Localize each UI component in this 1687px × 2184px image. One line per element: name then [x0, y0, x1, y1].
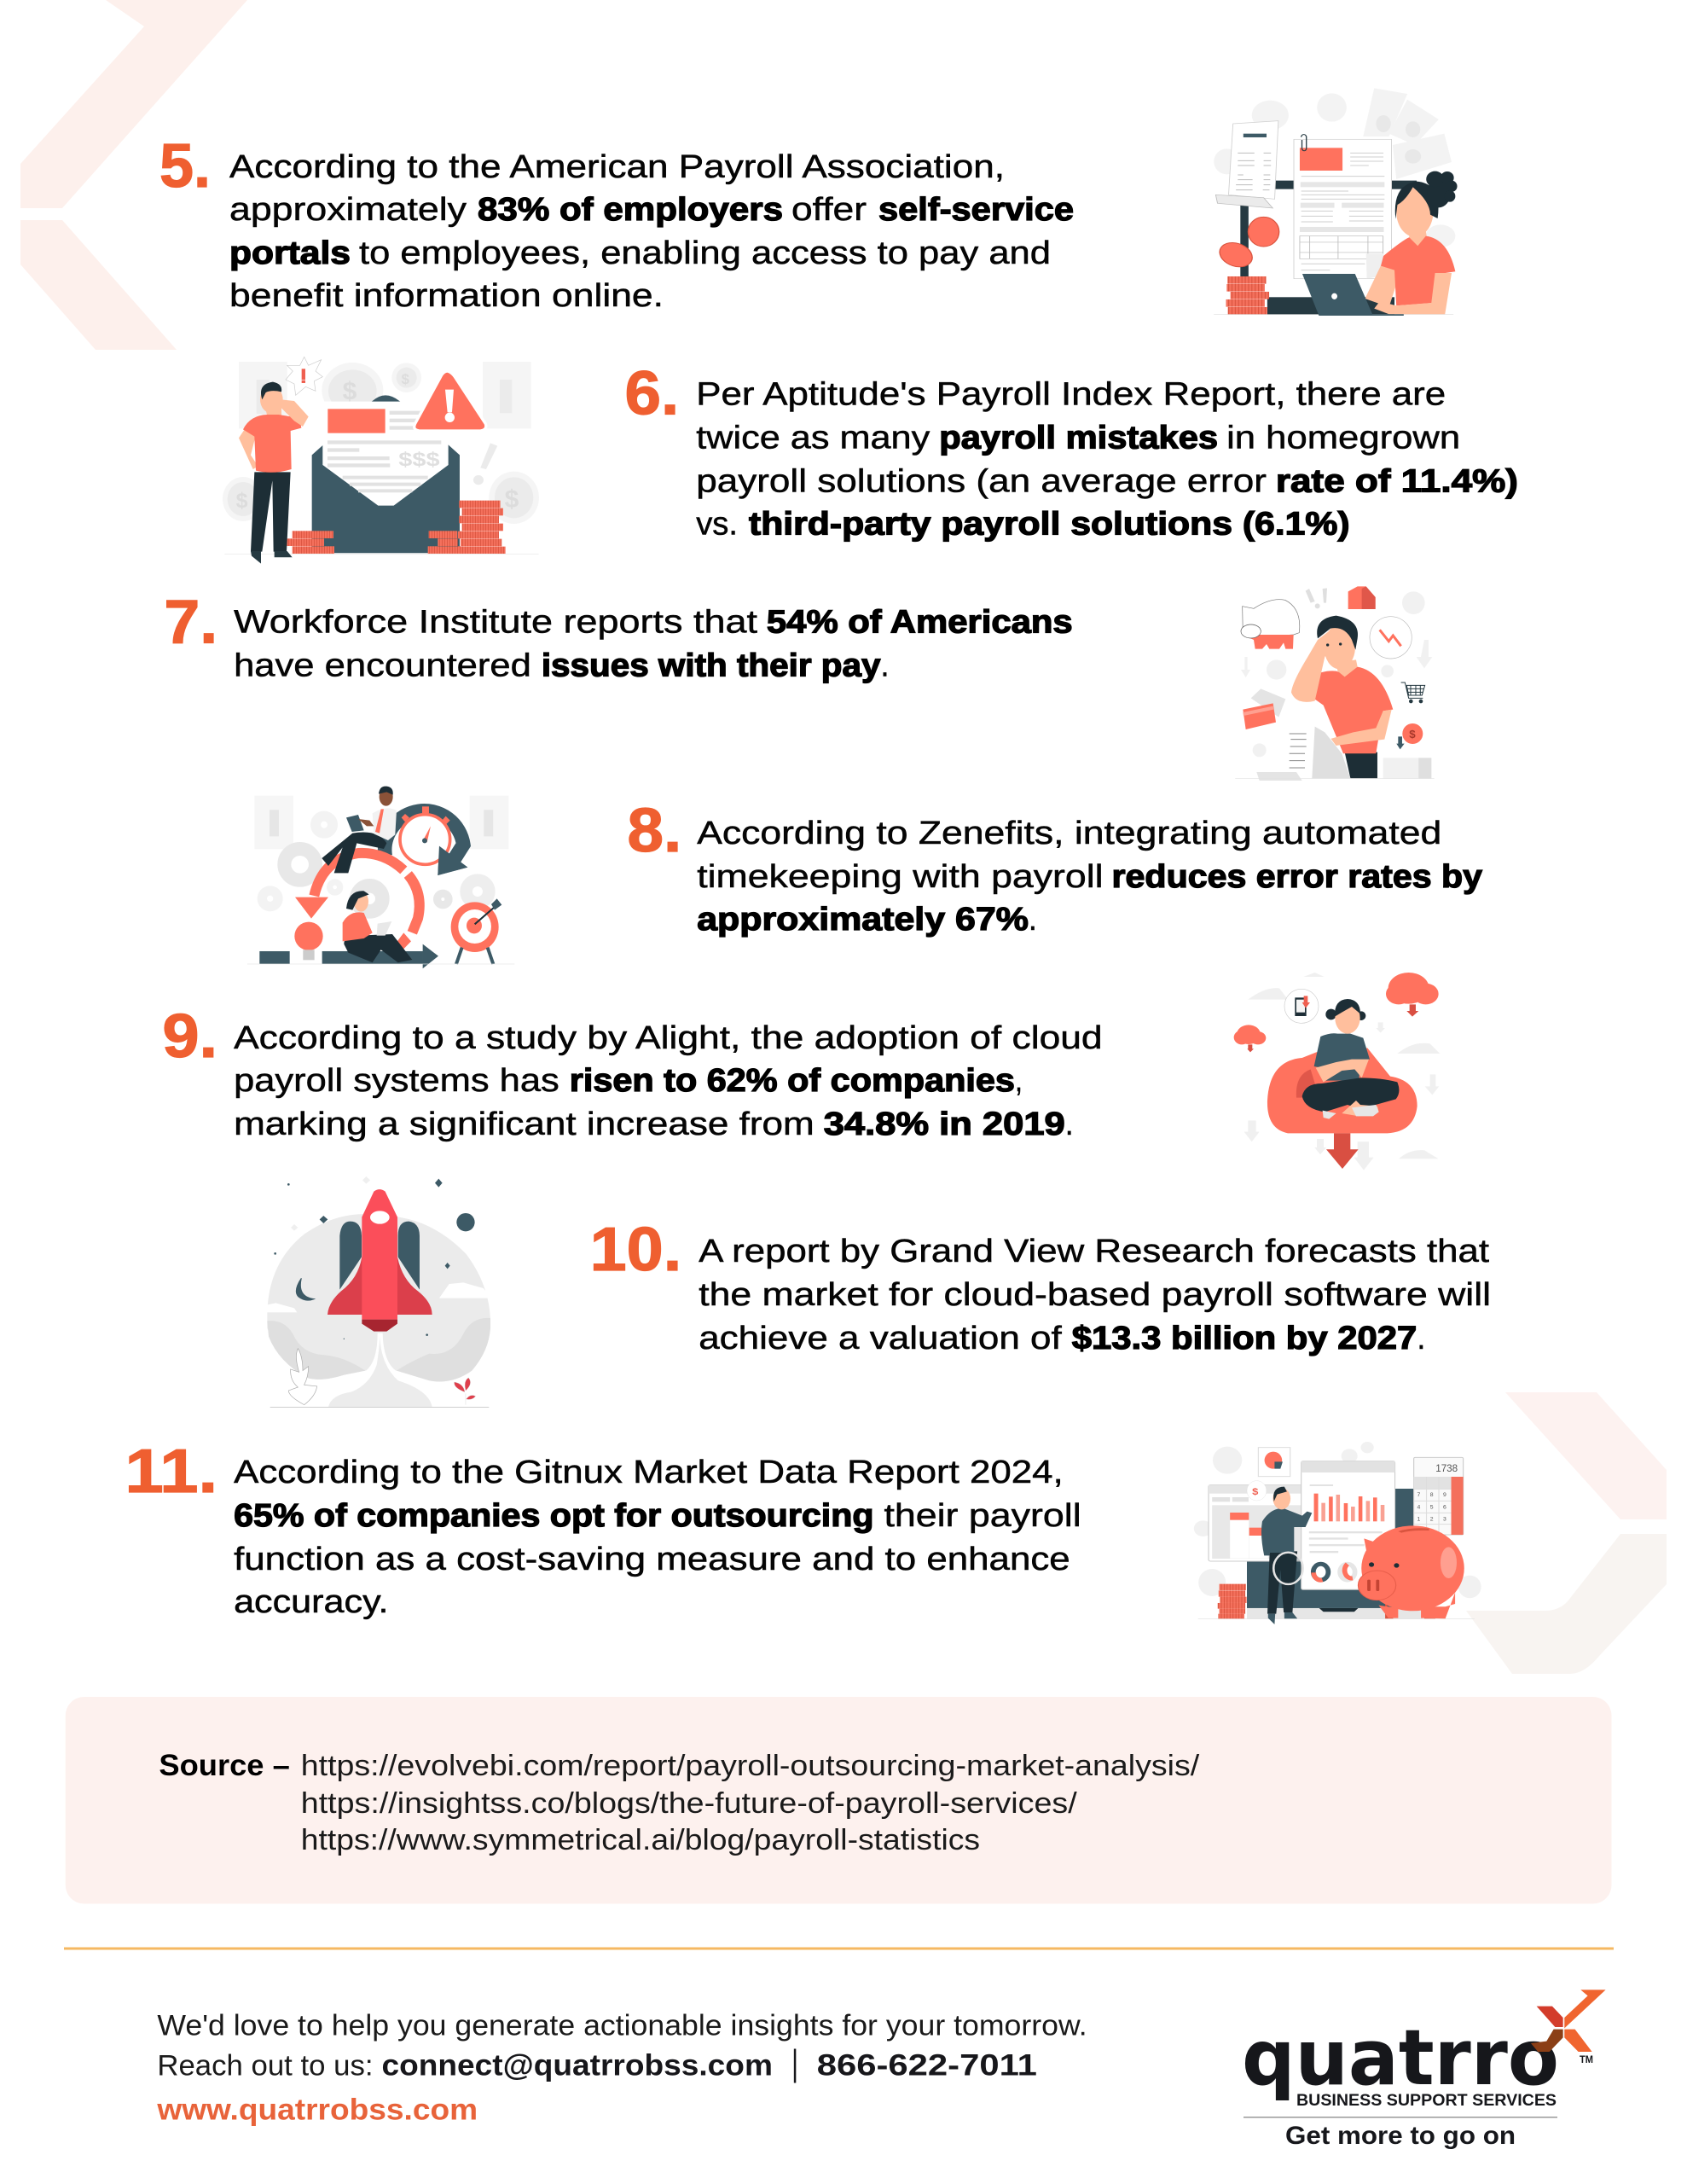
woman	[1365, 260, 1400, 307]
footer contact: connect@quatrrobss.com	[381, 2048, 773, 2082]
statistic 5 text: to employees, enabling access to pay and	[359, 235, 1051, 271]
statistic 10 text: the market for cloud-based payroll software will	[699, 1277, 1491, 1313]
statistic 8 text	[697, 816, 1482, 938]
man	[251, 472, 291, 552]
footer contact	[156, 2009, 1087, 2127]
statistic 6 text: Per Aptitude's Payroll Index Report, there are	[696, 376, 1446, 412]
statistic 8 text: According to Zenefits, integrating automated	[697, 816, 1441, 851]
illustration: analyst with piggy bank and reports: 1738	[1435, 1462, 1458, 1474]
source links	[301, 1750, 1200, 1856]
statistic 9 text	[234, 1020, 1103, 1142]
logo: BUSINESS SUPPORT SERVICES	[1296, 2092, 1557, 2110]
statistic 6 text: third-party payroll solutions (6.1%)	[749, 506, 1350, 542]
item 9	[162, 1002, 1103, 1142]
illustration: analyst with piggy bank and reports: 2	[1430, 1517, 1434, 1523]
number 5: 5.	[159, 132, 211, 200]
illustration: analyst with piggy bank and reports: 1	[1417, 1517, 1421, 1523]
statistic 11 text	[234, 1455, 1081, 1620]
statistic 9 text: According to a study by Alight, the adoption of cloud	[234, 1020, 1103, 1056]
statistic 5 text: 83% of employers	[478, 192, 783, 228]
illustration: envelope with warning and worried man	[223, 357, 539, 564]
illustration: woman on cloud beanbag	[1234, 973, 1440, 1170]
statistic 6 text: in homegrown	[1226, 420, 1460, 456]
footer contact: 866-622-7011	[817, 2048, 1037, 2082]
illustration: automated cycle with clock and target	[247, 787, 514, 968]
statistic 5 text: approximately	[229, 192, 467, 228]
statistic 8 text: approximately 67%	[697, 902, 1029, 938]
statistic 10 text	[699, 1234, 1491, 1356]
cloud right	[1386, 973, 1439, 1004]
statistic 11 text: their payroll	[884, 1498, 1081, 1534]
illustration: analyst with piggy bank and reports: $	[1252, 1486, 1259, 1497]
source links: https://evolvebi.com/report/payroll-outsourcing-market-analysis/	[301, 1750, 1200, 1782]
statistic 8 text: timekeeping with payroll	[697, 859, 1104, 895]
piggy	[1385, 1601, 1435, 1618]
cloud left	[1234, 1025, 1266, 1044]
illustration: analyst with piggy bank and reports: 8	[1430, 1492, 1434, 1498]
statistic 10 text: A report by Grand View Research forecasts that	[699, 1234, 1490, 1269]
logo: quatrro	[1242, 2013, 1559, 2103]
illustration: analyst with piggy bank and reports: 3	[1443, 1517, 1446, 1523]
statistic 10 text: .	[1417, 1321, 1425, 1356]
statistic 7 text	[234, 604, 1073, 683]
illustration: analyst with piggy bank and reports: 4	[1417, 1505, 1421, 1511]
statistic 7 text: issues with their pay	[542, 648, 880, 683]
statistic 5 text: According to the American Payroll Association,	[229, 149, 1005, 185]
statistic 5 text: offer	[791, 192, 867, 228]
illustration: envelope with warning and worried man: $	[343, 377, 357, 405]
statistic 11 text: 65% of companies opt for outsourcing	[234, 1498, 874, 1534]
analyst	[1267, 1551, 1297, 1614]
item 10	[590, 1216, 1491, 1356]
statistic 5 text: benefit information online.	[229, 278, 664, 314]
statistic 11 text: accuracy.	[234, 1584, 388, 1620]
item 7	[164, 588, 1073, 683]
number 9: 9.	[162, 1002, 217, 1071]
illustration: analyst with piggy bank and reports: 7	[1417, 1492, 1421, 1498]
logo: Get more to go on	[1285, 2122, 1516, 2150]
statistic 9 text: payroll systems has	[234, 1063, 559, 1099]
illustration: man with bills and piggy bank: $	[1409, 728, 1416, 741]
statistic 7 text: .	[880, 648, 889, 683]
statistic 11 text: According to the Gitnux Market Data Report 2024,	[234, 1455, 1064, 1490]
illustration: envelope with warning and worried man: $$$	[398, 449, 440, 471]
source links: https://insightss.co/blogs/the-future-of-payroll-services/	[301, 1787, 1077, 1820]
illustration: analyst with piggy bank and reports: 5	[1430, 1505, 1434, 1511]
statistic 8 text: reduces error rates by	[1112, 859, 1482, 895]
item 5	[159, 132, 1074, 314]
statistic 9 text: marking a significant increase from	[234, 1107, 815, 1142]
footer contact: We'd love to help you generate actionable insights for your tomorrow.	[157, 2009, 1087, 2042]
background chevron bottom right	[1466, 1392, 1667, 1674]
background chevron top left	[20, 0, 247, 350]
panel: sources	[66, 1697, 1612, 1904]
statistic 10 text: $13.3 billion by 2027	[1072, 1321, 1417, 1356]
statistic 6 text	[696, 376, 1518, 542]
illustration: envelope with warning and worried man: $	[402, 371, 410, 387]
statistic 7 text: Workforce Institute reports that	[234, 604, 758, 640]
statistic 9 text: risen to 62% of companies	[570, 1063, 1015, 1099]
statistic 5 text: portals	[229, 235, 351, 271]
number 7: 7.	[164, 588, 217, 656]
source links: https://www.symmetrical.ai/blog/payroll-statistics	[301, 1824, 980, 1856]
statistic 9 text: ,	[1015, 1063, 1023, 1099]
statistic 7 text: 54% of Americans	[767, 604, 1073, 640]
statistic 6 text: payroll mistakes	[939, 420, 1218, 456]
statistic 6 text: twice as many	[696, 420, 930, 456]
logo: TM	[1580, 2053, 1593, 2065]
illustration: envelope with warning and worried man: $	[505, 485, 519, 514]
illustration: analyst with piggy bank and reports	[1194, 1442, 1481, 1624]
illustration: man with bills and piggy bank	[1235, 586, 1435, 781]
statistic 9 text: 34.8% in 2019	[824, 1107, 1065, 1142]
number 8: 8.	[627, 797, 681, 865]
man on arc	[322, 833, 386, 873]
item 6	[625, 359, 1518, 542]
item 8	[627, 797, 1482, 938]
number 11: 11.	[125, 1438, 217, 1506]
statistic 8 text: .	[1029, 902, 1037, 938]
source label: Source –	[159, 1749, 290, 1782]
illustration: analyst with piggy bank and reports: 6	[1443, 1505, 1446, 1511]
logo	[1242, 1989, 1606, 2150]
statistic 11 text: function as a cost-saving measure and to enhance	[234, 1542, 1070, 1577]
illustration: envelope with warning and worried man: $	[236, 489, 248, 513]
statistic 5 text	[229, 149, 1074, 314]
statistic 10 text: achieve a valuation of	[699, 1321, 1062, 1356]
statistic 6 text: vs.	[696, 506, 738, 542]
statistic 9 text: .	[1065, 1107, 1074, 1142]
statistic 7 text: have encountered	[234, 648, 531, 683]
number 10: 10.	[590, 1216, 681, 1284]
number 6: 6.	[625, 359, 679, 427]
statistic 5 text: self-service	[878, 192, 1074, 228]
statistic 6 text: rate of 11.4%)	[1276, 463, 1518, 499]
statistic 6 text: payroll solutions (an average error	[696, 463, 1267, 499]
illustration: rocket launch	[264, 1176, 492, 1408]
item 11	[125, 1438, 1081, 1620]
website: www.quatrrobss.com	[156, 2093, 478, 2127]
woman seated	[344, 934, 412, 962]
illustration: woman at laptop with payslip	[1214, 88, 1458, 316]
footer contact: Reach out to us:	[157, 2049, 374, 2082]
illustration: analyst with piggy bank and reports: 9	[1443, 1492, 1446, 1498]
